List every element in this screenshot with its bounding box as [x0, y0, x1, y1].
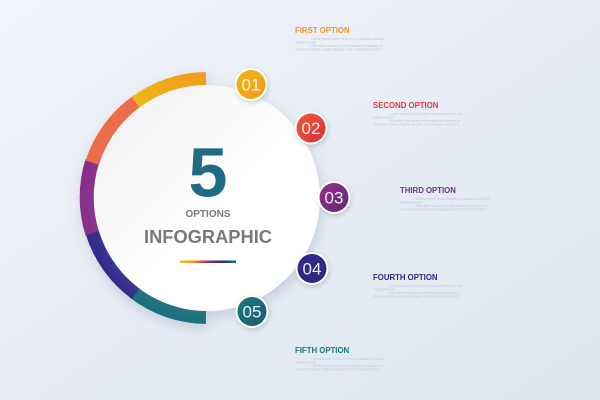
- text block: first option: FIRST OPTION: [295, 26, 350, 35]
- text block: third option: ut laoreet dolore magna aliquam erat volutpat sed diam: [400, 208, 486, 212]
- ring segment: teal: [134, 292, 206, 317]
- text block: first option: [295, 26, 384, 52]
- badge 04: [296, 252, 328, 285]
- badge 01: 01: [242, 76, 260, 94]
- badge 02: 02: [302, 119, 320, 138]
- text block: fifth option: ut laoreet dolore magna aliquam erat volutpat sed diam: [295, 368, 381, 372]
- numeral 5: 5: [189, 134, 227, 212]
- text block: fourth option: Sed diam nonummy nibh euismod tincidunt ut: [389, 291, 460, 295]
- text block: third option: [400, 186, 489, 212]
- text block: third option: Sed diam nonummy nibh euismod tincidunt ut: [416, 204, 487, 208]
- text block: second option: [373, 101, 462, 126]
- ring segment: indigo: [92, 232, 136, 293]
- text block: second option: SECOND OPTION: [373, 101, 439, 110]
- text block: first option: Sed diam nonummy nibh euismod tincidunt ut: [311, 44, 382, 48]
- label: options: OPTIONS: [185, 209, 231, 220]
- text block: fifth option: Sed diam nonummy nibh euismod tincidunt ut: [311, 364, 382, 368]
- central disc: [94, 85, 320, 311]
- label: infographic: INFOGRAPHIC: [144, 226, 272, 247]
- badge 05: [236, 295, 268, 328]
- text block: fourth option: adipiscing elit: [373, 288, 394, 292]
- segmented ring: [87, 79, 206, 317]
- text block: fourth option: [373, 273, 462, 298]
- badge 03: 03: [325, 188, 343, 208]
- text block: fourth option: ut laoreet dolore magna aliquam erat volutpat sed diam: [373, 294, 459, 298]
- text block: fourth option: Lorem ipsum dolor sit amet consectetur elit sed: [389, 284, 462, 288]
- badge 04: 04: [303, 260, 321, 278]
- text block: fifth option: adipiscing elit: [295, 360, 316, 364]
- text block: second option: adipiscing elit: [373, 116, 394, 120]
- gradient underline: [180, 260, 236, 263]
- text block: first option: adipiscing elit: [295, 40, 316, 44]
- ring segment: purple: [87, 161, 92, 233]
- badge 03: [318, 181, 350, 214]
- text block: first option: ut laoreet dolore magna aliquam erat volutpat sed diam: [295, 48, 381, 52]
- text block: second option: Lorem ipsum dolor sit amet consectetur elit sed: [389, 112, 462, 116]
- text block: second option: Sed diam nonummy nibh euismod tincidunt ut: [389, 119, 460, 123]
- ring segment: orange: [92, 101, 138, 163]
- ring segment: yellow: [136, 79, 206, 103]
- text block: fifth option: FIFTH OPTION: [295, 346, 350, 355]
- badge 02: [294, 112, 328, 144]
- text block: third option: Lorem ipsum dolor sit amet consectetur elit sed: [416, 197, 489, 201]
- text block: first option: Lorem ipsum dolor sit amet consectetur elit sed: [311, 37, 384, 41]
- text block: fifth option: Lorem ipsum dolor sit amet consectetur elit sed: [311, 357, 384, 361]
- text block: fourth option: FOURTH OPTION: [373, 273, 438, 282]
- text block: fifth option: [295, 346, 384, 372]
- text block: third option: adipiscing elit: [400, 200, 421, 204]
- badge 05: 05: [243, 302, 261, 322]
- badge 01: [234, 68, 268, 101]
- text block: second option: ut laoreet dolore magna aliquam erat volutpat sed diam: [373, 122, 459, 126]
- text block: third option: THIRD OPTION: [400, 186, 456, 195]
